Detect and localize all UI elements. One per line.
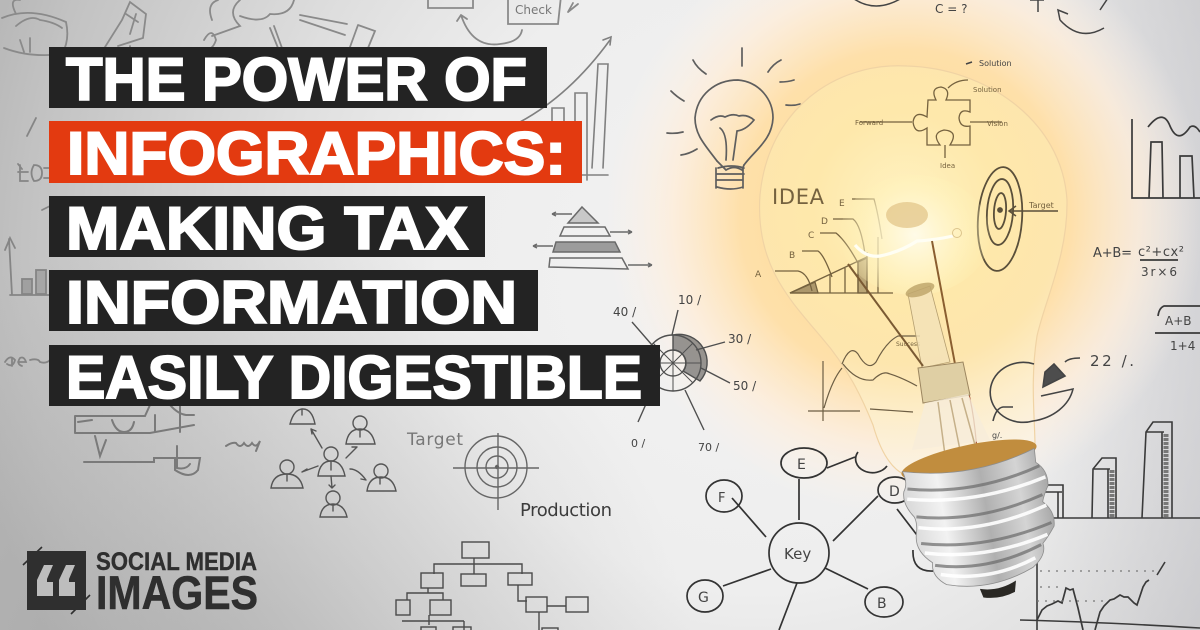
icon: small sketched lightbulb — [667, 48, 800, 189]
lightbulb — [755, 66, 1080, 611]
target sketch and labels: Target — [406, 430, 463, 450]
title line 5: EASILY DIGESTIBLE — [66, 344, 642, 411]
right side sketches: 22 /. — [1090, 352, 1134, 370]
right side sketches: 1+4 — [1170, 339, 1195, 353]
icon: radial percentage chart: 30 / — [728, 332, 752, 346]
warm glow — [605, 0, 1200, 515]
key diagram: Key — [784, 545, 811, 563]
puzzle sketch: Vision — [987, 120, 1008, 128]
filament glow — [840, 175, 990, 295]
amber base interior — [898, 431, 1040, 489]
glass envelope — [760, 66, 1067, 475]
people network — [271, 409, 396, 517]
icon: radial percentage chart — [613, 293, 757, 454]
lower chart in bulb: Success — [896, 341, 920, 348]
pinch seal — [918, 362, 970, 403]
icon: pyramid chart — [533, 207, 652, 269]
key diagram: E — [797, 457, 806, 473]
key diagram: F — [718, 491, 725, 506]
key diagram — [687, 448, 933, 630]
top sketches: Solution — [979, 59, 1012, 68]
right side sketches: c²+cx² — [1138, 245, 1184, 260]
icon: quote mark badge — [23, 547, 90, 614]
lower chart in bulb — [808, 336, 920, 421]
target sketch and labels — [406, 430, 612, 521]
right side sketches: A+B — [1165, 314, 1192, 328]
target in bulb — [974, 166, 1058, 272]
idea stepped chart sketch: E — [839, 199, 845, 209]
idea stepped chart sketch: IDEA — [772, 185, 825, 209]
right side bar and line charts — [1020, 422, 1200, 630]
idea stepped chart sketch: A — [755, 270, 762, 280]
glass pie sketch — [990, 358, 1080, 422]
right side sketches: A+B= — [1093, 246, 1132, 261]
idea stepped chart sketch: D — [821, 217, 828, 227]
hand-drawn sketches top left — [2, 0, 578, 58]
right side sketches: 3r×6 — [1141, 265, 1177, 279]
puzzle sketch: Solution — [973, 86, 1002, 94]
lead wires — [848, 264, 923, 366]
title line 2, highlighted: INFOGRAPHICS: — [67, 120, 566, 187]
target in bulb: Target — [1028, 201, 1054, 210]
title block — [49, 46, 660, 411]
lightbulb: g/. — [992, 431, 1002, 440]
logo: social media images: IMAGES — [96, 566, 258, 619]
right side sketches — [1090, 117, 1200, 370]
title line 4: INFORMATION — [66, 269, 517, 336]
puzzle sketch — [855, 80, 1008, 170]
key diagram: G — [698, 590, 709, 606]
idea stepped chart sketch: B — [789, 251, 795, 261]
top sketches — [850, 0, 1108, 68]
target sketch and labels: Production — [520, 500, 612, 521]
title line 1: THE POWER OF — [66, 46, 527, 113]
icon: radial percentage chart: 70 / — [698, 441, 719, 454]
stem — [908, 286, 950, 368]
machine sketch — [75, 405, 260, 475]
idea stepped chart sketch: C — [808, 231, 814, 241]
screw base — [899, 447, 1066, 611]
key diagram: D — [889, 484, 900, 500]
idea stepped chart sketch — [755, 185, 893, 293]
puzzle sketch: Forward — [855, 119, 883, 127]
icon: radial percentage chart: 50 / — [733, 379, 757, 393]
top sketches: C = ? — [935, 2, 967, 16]
left-edge sketches — [5, 118, 50, 366]
puzzle sketch: Idea — [940, 162, 955, 170]
logo wordmark: SOCIAL MEDIA — [96, 548, 257, 576]
key diagram: B — [877, 596, 887, 612]
growth bar chart sketch — [520, 37, 611, 180]
hand-drawn sketches top left: Check — [515, 3, 552, 17]
logo: social media images — [23, 547, 258, 619]
icon: radial percentage chart: 40 / — [613, 305, 637, 319]
icon: radial percentage chart: 10 / — [678, 293, 702, 307]
title line 3: MAKING TAX — [66, 195, 468, 262]
icon: radial percentage chart: 0 / — [631, 437, 645, 450]
org chart sketch — [396, 542, 588, 630]
